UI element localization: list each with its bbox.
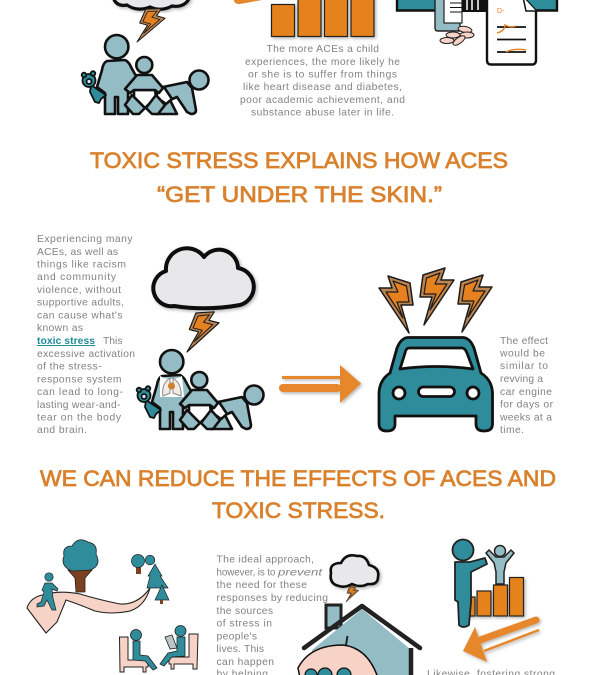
left paragraph: and community [37,272,117,283]
car paragraph: time. [500,425,524,436]
lightning bolts over car [379,268,492,333]
prevention paragraph: of stress in [216,618,272,630]
top paragraph: The more ACEs a child [266,44,379,55]
left paragraph: tear on the body [37,412,122,424]
prevention paragraph [216,554,328,675]
adult lifting child on bars [452,540,524,627]
left paragraph [37,234,135,436]
left paragraph: This [103,336,122,347]
therapy chairs illustration [120,626,198,672]
car paragraph: would be [499,348,545,360]
left paragraph: known as [37,323,83,334]
big storm cloud [153,248,254,358]
prevention paragraph: responses by reducing [216,593,328,604]
icon: car [379,338,492,431]
car paragraph: car engine [500,387,552,398]
prevention paragraph: can happen [216,657,274,668]
top paragraph: or she is to suffer from things [248,70,397,80]
left paragraph: supportive adults, [37,298,124,308]
prevention paragraph: the need for these [216,580,307,591]
left paragraph: of the stress- [37,362,102,372]
left paragraph: Experiencing many [37,234,133,245]
car paragraph: revving a [500,374,543,385]
diagonal orange arrow [463,620,539,662]
car paragraph: similar to [500,361,548,372]
prevention paragraph: prevent [277,568,323,578]
car paragraph: The effect [500,336,548,347]
top arrow remnant [234,0,262,4]
left paragraph: toxic stress [37,336,95,347]
left paragraph: ACEs, as well as [37,247,118,258]
left paragraph: excessive activation [37,349,135,360]
doctor office illustration: D- [497,8,505,15]
heading: toxic stress: “GET UNDER THE SKIN.” [157,182,442,207]
left paragraph: can lead to long- [37,387,123,398]
prevention paragraph: however, is to [216,568,276,578]
prevention paragraph: the sources [216,606,273,617]
prevention paragraph: The ideal approach, [216,554,314,566]
heading: toxic stress [90,148,508,207]
nature walk illustration [27,540,169,633]
car paragraph: weeks at a [499,412,552,424]
heading: reduce effects: WE CAN REDUCE THE EFFECTS OF ACES AND [40,466,556,491]
family figures with lungs [137,350,264,429]
left paragraph: response system [37,374,122,386]
small cloud and house illustration [298,555,420,675]
prevention paragraph: lives. This [216,644,264,655]
heading: reduce effects: TOXIC STRESS. [212,498,385,523]
prevention paragraph: people's [216,632,257,642]
car paragraph: for days or [500,400,554,410]
left paragraph: can cause what's [37,310,122,322]
left paragraph: and brain. [37,425,87,436]
top family figures [82,35,208,114]
car paragraph [499,336,554,436]
top paragraph: experiences, the more likely he [245,57,400,68]
top paragraph [240,44,405,118]
top paragraph: like heart disease and diabetes, [243,82,402,93]
left paragraph: things like racism [37,260,126,270]
heading: reduce effects [40,466,556,523]
doctor office illustration [397,0,557,64]
top storm cloud [113,0,190,48]
left paragraph: violence, without [37,285,121,296]
heading: toxic stress: TOXIC STRESS EXPLAINS HOW ACES [90,148,508,173]
top paragraph: poor academic achievement, and [240,95,405,106]
main orange arrow [279,365,361,403]
icon: lungs [160,376,184,397]
left paragraph: lasting wear-and- [37,400,120,411]
top bar chart [272,0,374,36]
top paragraph: substance abuse later in life. [251,108,394,118]
